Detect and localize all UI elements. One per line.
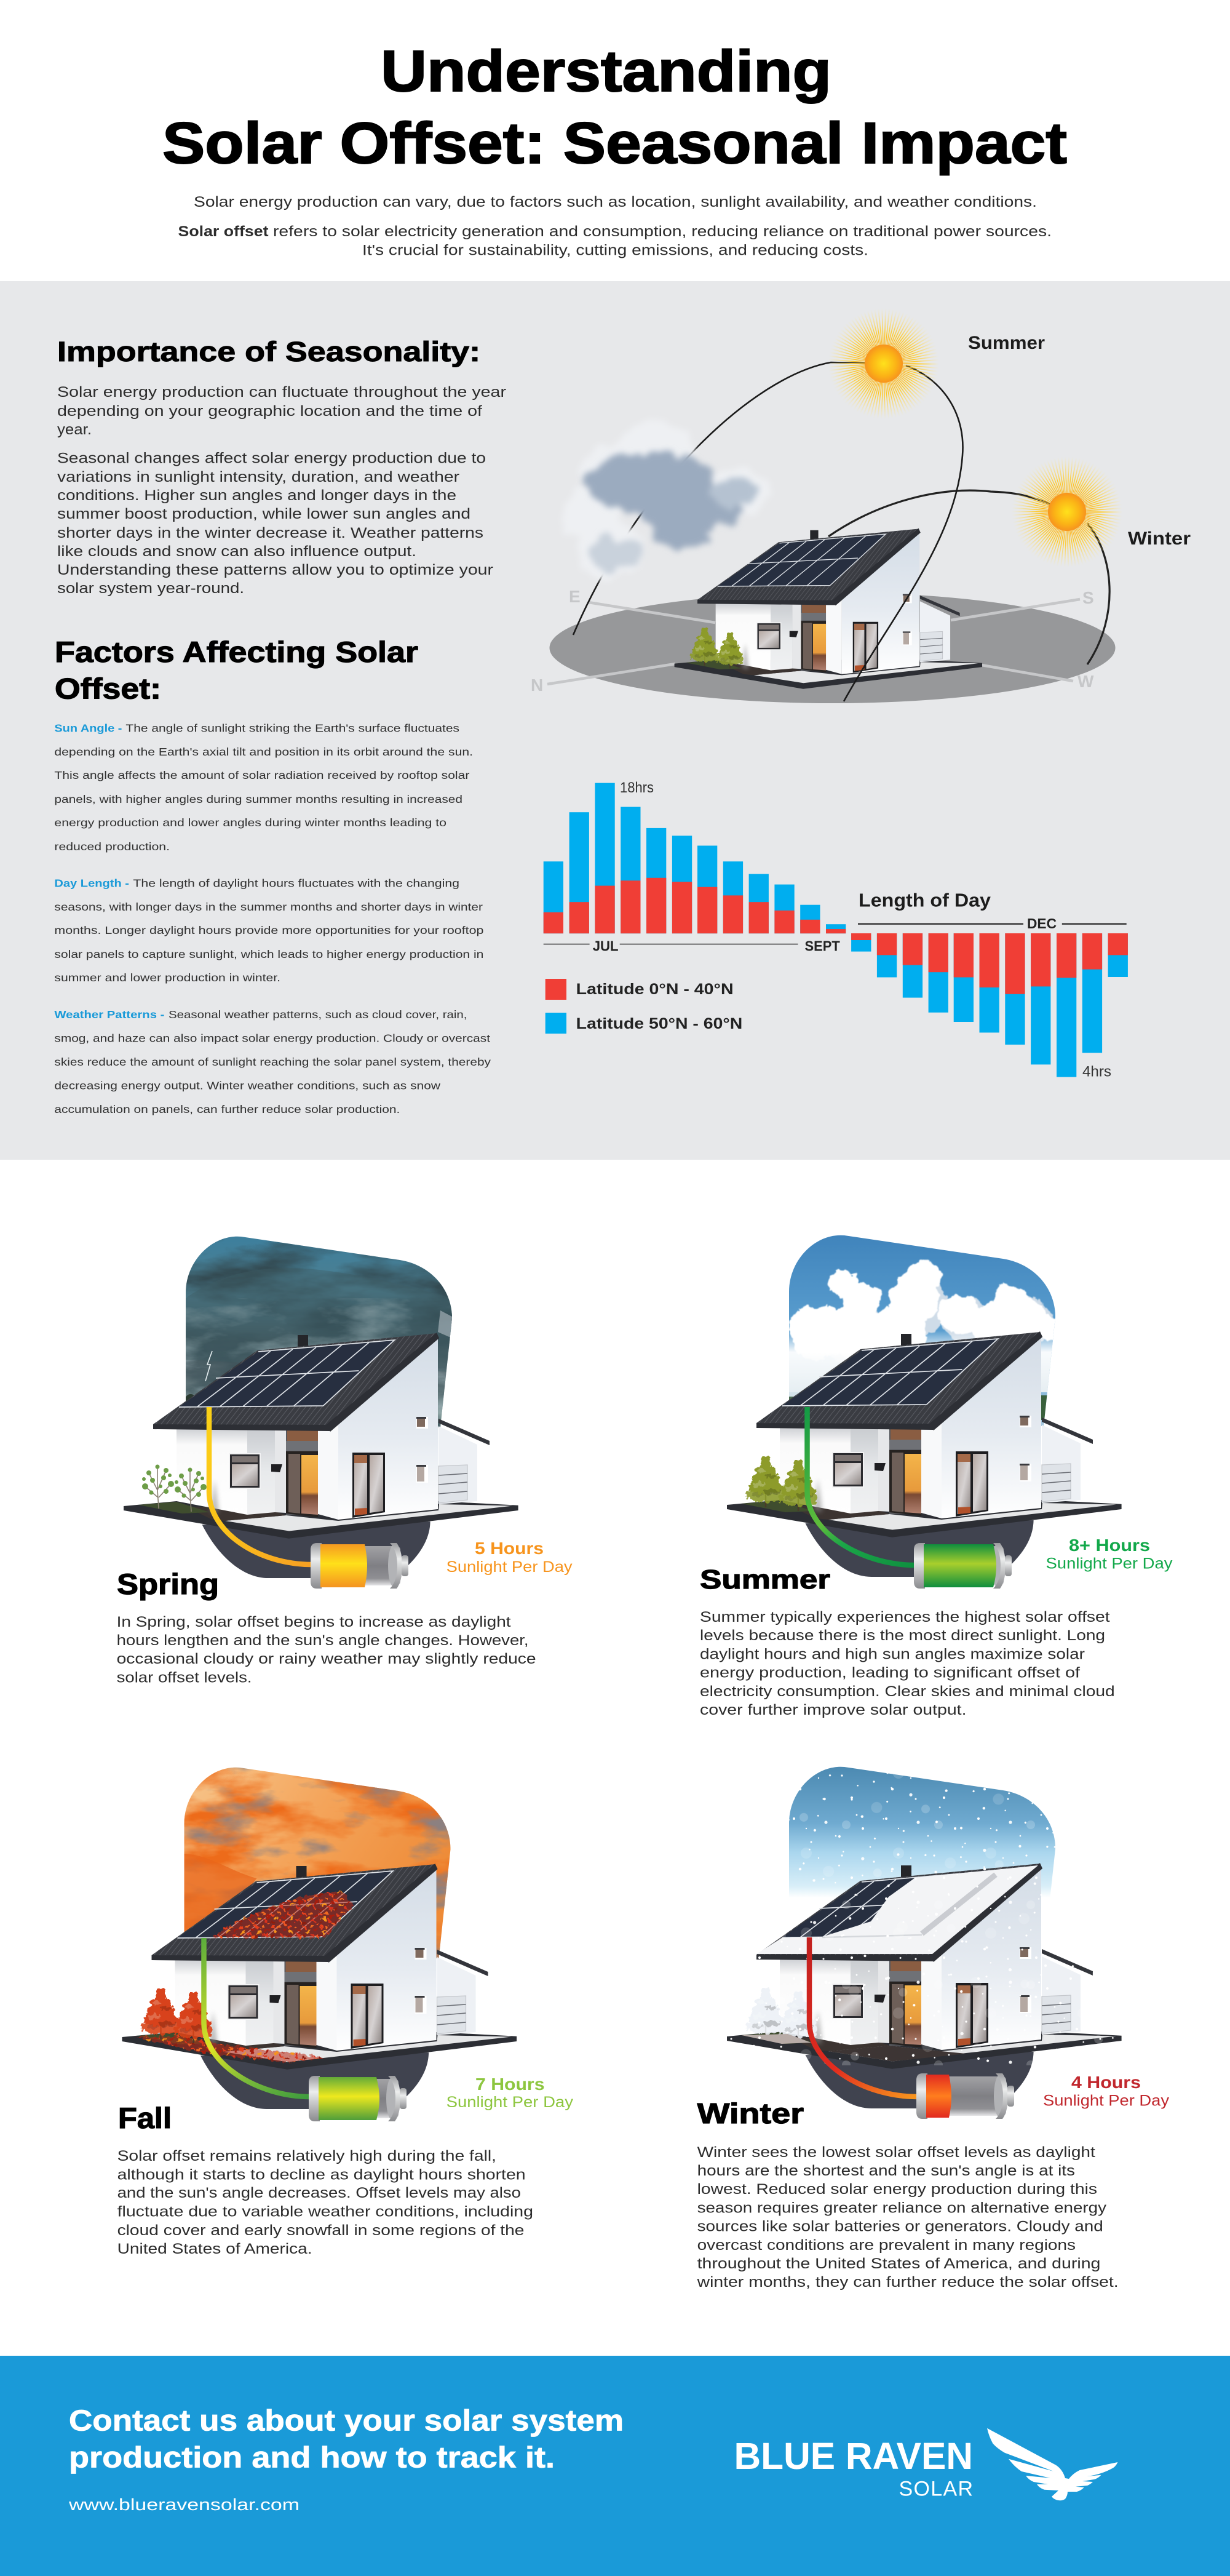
text block: spring: In Spring, solar offset begins to increase as daylight <box>117 1614 511 1630</box>
text block: seasonality paragraphs <box>57 384 506 597</box>
text block: sun angle: depending on the Earth's axial tilt and position in its orbit around the sun. <box>54 746 473 758</box>
callout: 8+ hours: Sunlight Per Day <box>1046 1555 1173 1573</box>
call to action <box>69 2405 624 2474</box>
text block: fall <box>117 2148 533 2257</box>
text block: sun angle: Sun Angle - <box>54 722 122 734</box>
icon: summer sun <box>846 325 922 402</box>
callout: 5 hours <box>446 1539 573 1576</box>
text block: sun angle: The angle of sunlight striking the Earth's surface fluctuates <box>125 722 459 734</box>
text block: spring: solar offset levels. <box>117 1670 252 1686</box>
call to action: production and how to track it. <box>69 2442 555 2474</box>
text block: sun angle <box>54 722 473 853</box>
text block: sun angle: energy production and lower angles during winter months leading to <box>54 816 446 829</box>
text block: seasonality paragraphs: depending on your geographic location and the time of <box>57 403 482 420</box>
panel: footer <box>0 2356 1230 2576</box>
compass lines and letters: N <box>531 676 543 695</box>
callout: 4 hours: Sunlight Per Day <box>1043 2092 1170 2110</box>
callout: 4 hours <box>1043 2073 1170 2110</box>
text block: weather patterns: smog, and haze can also impact solar energy production. Cloudy or overcast <box>54 1032 490 1045</box>
chart title: Length of Day <box>859 890 991 911</box>
text block: summer: levels because there is the most direct sunlight. Long <box>700 1627 1105 1644</box>
summer sun path, setting <box>844 365 963 701</box>
text block: winter: Winter sees the lowest solar offset levels as daylight <box>697 2144 1095 2161</box>
callout: 7 hours: 7 Hours <box>475 2075 545 2094</box>
illustration: spring house <box>124 1234 518 1578</box>
heading: factors: Factors Affecting Solar <box>55 636 418 668</box>
legend: Latitude 50°N - 60°N <box>576 1015 742 1032</box>
value labels: 4hrs <box>1082 1063 1111 1080</box>
winter sun path, rising <box>828 490 1067 536</box>
conduit: spring <box>209 1407 312 1565</box>
title: Solar Offset: Seasonal Impact <box>162 111 1067 176</box>
text block: day length: The length of daylight hours fluctuates with the changing <box>133 877 459 890</box>
text block: summer: energy production, leading to significant offset of <box>700 1664 1080 1681</box>
intro text: Solar offset <box>178 223 268 240</box>
text block: seasonality paragraphs: solar system year-round. <box>57 580 244 597</box>
icon: summer battery <box>914 1543 1012 1589</box>
text block: day length: solar panels to capture sunlight, which leads to higher energy production in <box>54 948 483 960</box>
text block: winter <box>696 2144 1119 2291</box>
illustration: summer house <box>727 1232 1122 1577</box>
cloud <box>560 424 769 579</box>
text block: fall: although it starts to decline as daylight hours shorten <box>117 2166 526 2183</box>
text block: seasonality paragraphs: shorter days in the winter decrease it. Weather patterns <box>57 525 483 541</box>
heading: factors: Offset: <box>55 672 161 705</box>
chart: length of day <box>544 780 1128 1080</box>
text block: seasonality paragraphs: year. <box>57 421 92 438</box>
text block: weather patterns: accumulation on panels, can further reduce solar production. <box>54 1103 400 1115</box>
label: summer: Summer <box>968 333 1045 353</box>
icon: winter sun <box>1029 474 1105 550</box>
label: winter: Winter <box>1128 528 1191 549</box>
heading: factors <box>55 636 418 705</box>
text block: seasonality paragraphs: Seasonal changes affect solar energy production due to <box>57 450 486 466</box>
text block: summer: electricity consumption. Clear skies and minimal cloud <box>700 1683 1115 1700</box>
text block: weather patterns <box>54 1008 491 1115</box>
text block: fall: and the sun's angle decreases. Offset levels may also <box>117 2185 521 2201</box>
text block: summer: daylight hours and high sun angles maximize solar <box>700 1646 1085 1662</box>
house illustration <box>675 528 982 689</box>
heading: spring: Spring <box>117 1568 219 1600</box>
month axis labels <box>544 915 1127 954</box>
value labels: 18hrs <box>620 780 654 796</box>
text block: weather patterns: Weather Patterns - <box>54 1008 165 1021</box>
compass lines and letters: E <box>569 587 581 606</box>
text block: summer: Summer typically experiences the highest solar offset <box>700 1609 1110 1625</box>
text block: winter: hours are the shortest and the sun's angle is at its <box>697 2163 1075 2179</box>
trees <box>689 628 744 668</box>
callout: 7 hours <box>446 2075 574 2111</box>
panel: factors affecting solar offset <box>54 636 491 1115</box>
text block: day length: Day Length - <box>54 877 129 890</box>
text block: fall: cloud cover and early snowfall in some regions of the <box>117 2222 524 2239</box>
text block: winter: overcast conditions are prevalent in many regions <box>697 2237 1076 2254</box>
heading: fall: Fall <box>118 2102 172 2134</box>
text block: winter: winter months, they can further reduce the solar offset. <box>696 2274 1119 2291</box>
text block: seasonality paragraphs: like clouds and snow can also influence output. <box>57 543 416 560</box>
intro text: It's crucial for sustainability, cutting emissions, and reducing costs. <box>362 242 868 258</box>
callout: 8+ hours <box>1046 1536 1173 1573</box>
callout: 7 hours: Sunlight Per Day <box>446 2094 574 2111</box>
icon: winter battery <box>916 2073 1014 2119</box>
panel: spring <box>117 1234 573 1686</box>
panel: seasonality background <box>0 281 1230 1160</box>
heading: importance of seasonality: Importance of Seasonality: <box>57 336 480 367</box>
value labels <box>620 780 1111 1080</box>
call to action: Contact us about your solar system <box>69 2405 624 2438</box>
text block: seasonality paragraphs: Solar energy production can fluctuate throughout the year <box>57 384 506 401</box>
compass lines and letters <box>531 587 1094 695</box>
compass lines and letters: S <box>1082 588 1094 607</box>
legend <box>546 979 742 1034</box>
text block: spring <box>117 1614 536 1686</box>
text block: day length: summer and lower production in winter. <box>54 971 280 984</box>
text block: weather patterns: skies reduce the amount of sunlight reaching the solar panel system, thereby <box>54 1056 491 1068</box>
text block: seasonality paragraphs: Understanding these patterns allow you to optimize your <box>57 562 493 578</box>
text block: day length: seasons, with longer days in the summer months and shorter days in winter <box>54 901 483 913</box>
conduit: summer <box>807 1407 915 1565</box>
heading: winter: Winter <box>697 2097 804 2129</box>
summer sun path, rising <box>573 362 884 635</box>
text block: winter: lowest. Reduced solar energy production during this <box>697 2181 1097 2198</box>
intro text: Solar energy production can vary, due to factors such as location, sunlight availability, and weather conditions. <box>194 194 1037 210</box>
ground ellipse <box>550 592 1116 703</box>
icon: spring battery <box>311 1543 408 1589</box>
text block: day length: months. Longer daylight hours provide more opportunities for your rooftop <box>54 924 483 936</box>
logo: blue raven solar: BLUE RAVEN <box>734 2435 973 2477</box>
title <box>162 39 1067 176</box>
text block: weather patterns: Seasonal weather patterns, such as cloud cover, rain, <box>169 1008 467 1021</box>
lower bars september to december <box>851 933 1128 1077</box>
website url: www.blueravensolar.com <box>68 2495 300 2514</box>
text block: seasonality paragraphs: conditions. Higher sun angles and longer days in the <box>57 487 456 504</box>
illustration: fall house <box>122 1765 517 2109</box>
text block: weather patterns: decreasing energy output. Winter weather conditions, such as snow <box>54 1079 440 1091</box>
intro text <box>178 194 1052 258</box>
text block: sun angle: panels, with higher angles during summer months resulting in increased <box>54 793 462 805</box>
heading: summer: Summer <box>700 1565 830 1595</box>
month axis labels: JUL <box>593 938 619 954</box>
text block: winter: sources like solar batteries or generators. Cloudy and <box>697 2218 1103 2235</box>
diagram: sun paths over house <box>531 325 1191 703</box>
panel: winter <box>696 1764 1170 2291</box>
text block: summer <box>700 1609 1115 1718</box>
panel: summer <box>700 1232 1173 1718</box>
month axis labels: SEPT <box>804 938 840 954</box>
text block: summer: cover further improve solar output. <box>700 1702 967 1718</box>
text block: winter: season requires greater reliance on alternative energy <box>697 2200 1106 2217</box>
conduit: winter <box>809 1937 918 2097</box>
winter sun path, setting <box>1087 524 1109 664</box>
panel: importance of seasonality <box>57 336 506 597</box>
text block: seasonality paragraphs: variations in sunlight intensity, duration, and weather <box>57 469 459 485</box>
text block: seasonality paragraphs: summer boost production, while lower sun angles and <box>57 506 470 522</box>
text block: spring: occasional cloudy or rainy weather may slightly reduce <box>117 1651 536 1667</box>
text block: fall: fluctuate due to variable weather conditions, including <box>117 2204 533 2220</box>
legend: Latitude 0°N - 40°N <box>576 981 734 998</box>
text block: fall: Solar offset remains relatively high during the fall, <box>117 2148 496 2164</box>
text block: sun angle: reduced production. <box>54 840 170 853</box>
panel: fall <box>117 1765 574 2257</box>
header panel <box>162 39 1067 258</box>
text block: winter: throughout the United States of America, and during <box>697 2255 1100 2272</box>
text block: day length <box>54 877 483 984</box>
callout: 8+ hours: 8+ Hours <box>1069 1536 1150 1555</box>
footer background <box>0 2356 1230 2576</box>
upper bars july to september <box>544 783 846 933</box>
logo: blue raven solar <box>734 2428 1117 2501</box>
month axis labels: DEC <box>1027 915 1057 931</box>
title: Understanding <box>381 39 831 104</box>
illustration: winter house <box>727 1764 1122 2108</box>
callout: 4 hours: 4 Hours <box>1071 2073 1141 2092</box>
icon: fall battery <box>309 2076 407 2121</box>
callout: 5 hours: Sunlight Per Day <box>446 1558 573 1576</box>
logo: blue raven solar: SOLAR <box>899 2478 973 2501</box>
conduit: fall <box>204 1938 310 2097</box>
text block: sun angle: This angle affects the amount of solar radiation received by rooftop solar <box>54 769 470 781</box>
intro text: refers to solar electricity generation and consumption, reducing reliance on traditional power sources. <box>273 223 1052 240</box>
callout: 5 hours: 5 Hours <box>475 1539 544 1558</box>
text block: fall: United States of America. <box>117 2241 312 2257</box>
text block: spring: hours lengthen and the sun's angle changes. However, <box>117 1632 529 1649</box>
compass lines and letters: W <box>1077 672 1094 691</box>
